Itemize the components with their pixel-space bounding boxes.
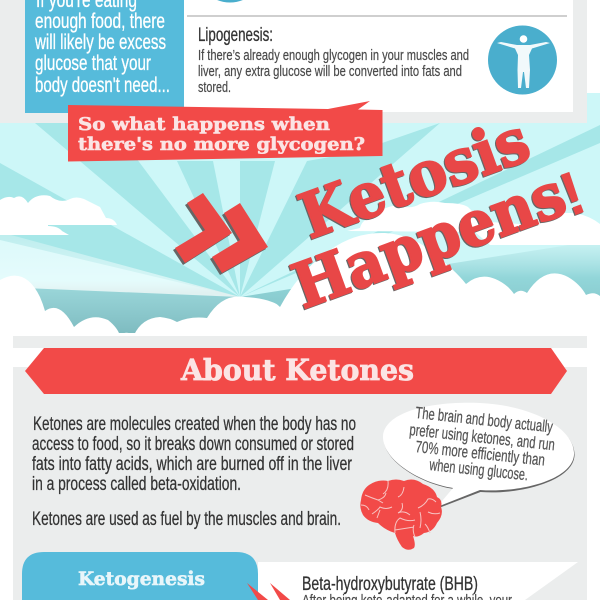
text block: about ketones: Ketones are molecules created when the body has no xyxy=(33,414,356,435)
text block: about ketones: access to food, so it breaks down consumed or stored xyxy=(32,434,354,455)
panel: excess glucose callout: glucose that your xyxy=(35,52,151,75)
text block: about ketones: in a process called beta-oxidation. xyxy=(32,474,241,495)
panel: excess glucose callout: body doesn't need... xyxy=(35,74,170,97)
speech banner: so what happens xyxy=(68,101,382,162)
title: ketosis happens: Ketosis xyxy=(290,103,539,253)
top grey panel xyxy=(0,0,600,123)
panel: excess glucose callout xyxy=(25,0,184,113)
panel: beta-hydroxybutyrate xyxy=(258,562,578,600)
speech banner: so what happens: there's no more glycogen? xyxy=(78,134,365,155)
title: ketosis happens: ! xyxy=(551,158,594,230)
text block: about ketones: Ketones are used as fuel by the muscles and brain. xyxy=(32,509,341,530)
icon: human body xyxy=(488,26,557,94)
panel: ketogenesis: Ketogenesis xyxy=(78,568,205,590)
panel: excess glucose callout: will likely be excess xyxy=(34,31,166,54)
lower grey panels xyxy=(13,336,587,600)
speech bubble: brain fact: when using glucose. xyxy=(428,456,529,484)
heading ribbon: about ketones: About Ketones xyxy=(180,353,414,387)
panel: excess glucose callout: enough food, there xyxy=(35,10,165,33)
speech bubble: brain fact xyxy=(383,403,575,508)
panel: lipogenesis: stored. xyxy=(198,80,231,96)
panel: lipogenesis: Lipogenesis: xyxy=(198,25,273,46)
speech banner: so what happens: So what happens when xyxy=(78,114,330,135)
text block: about ketones: fats into fatty acids, which are burned off in the liver xyxy=(32,454,352,475)
speech bubble: brain fact: 70% more efficiently than xyxy=(415,438,546,470)
panel: lipogenesis: If there’s already enough glycogen in your muscles and xyxy=(198,48,469,64)
panel: lipogenesis: liver, any extra glucose will be converted into fats and xyxy=(198,64,462,80)
arrow: red chevron tips xyxy=(247,583,290,600)
panel: beta-hydroxybutyrate: Beta-hydroxybutyrate (BHB) xyxy=(302,574,478,595)
panel: lipogenesis xyxy=(184,0,573,112)
title: ketosis happens: Happens xyxy=(283,157,575,323)
text block: about ketones xyxy=(32,414,356,530)
icon: double chevron arrow xyxy=(173,193,268,275)
icon: brain xyxy=(360,480,442,550)
clouds xyxy=(0,195,600,338)
heading ribbon: about ketones xyxy=(25,348,567,394)
panel: ketogenesis xyxy=(22,552,258,600)
sky background with sun rays xyxy=(0,93,600,333)
